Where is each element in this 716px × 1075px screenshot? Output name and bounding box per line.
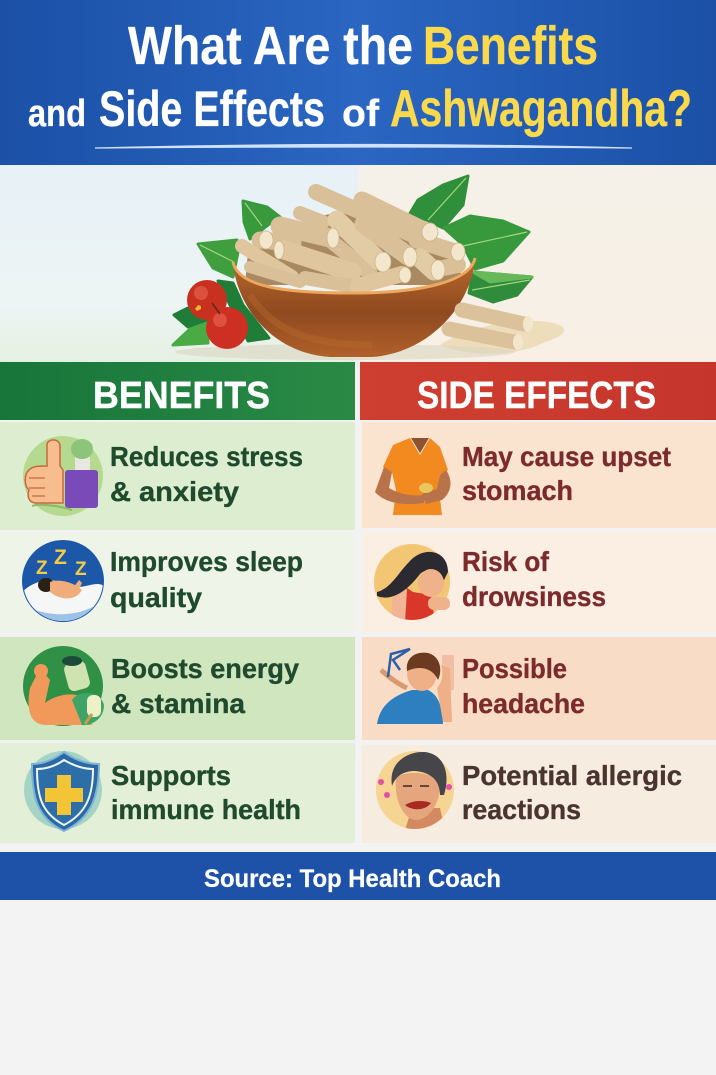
text: Boosts energy: [111, 653, 299, 684]
heading: side effects: [360, 362, 716, 420]
title: Side Effects: [99, 81, 325, 137]
icon: shield with cross: [24, 751, 102, 831]
leaf veins: [200, 178, 530, 290]
icon: drowsy woman: [374, 544, 450, 622]
back of root pile: [245, 212, 462, 285]
row: sleep: [0, 533, 355, 632]
back roots: [242, 192, 458, 288]
loose roots: [449, 310, 533, 350]
text: [462, 760, 682, 825]
icon: person holding stomach: [375, 438, 451, 515]
text: May cause upset: [462, 441, 671, 472]
icon: sleeping person: Z: [75, 559, 87, 580]
text: reactions: [462, 794, 581, 825]
row: drowsiness: [362, 532, 716, 632]
row: reduces stress: [0, 422, 355, 530]
text: Supports: [111, 760, 231, 791]
row: upset stomach: [362, 422, 716, 528]
text: headache: [462, 688, 585, 719]
leaves: [173, 176, 532, 345]
bowl: [233, 258, 475, 357]
panel: benefits: [0, 362, 355, 843]
text: Reduces stress: [110, 441, 303, 472]
header banner: [0, 0, 716, 165]
text: drowsiness: [462, 581, 606, 612]
text: [462, 546, 606, 612]
heading: benefits: BENEFITS: [93, 375, 270, 417]
text: [110, 546, 303, 613]
text: [110, 441, 303, 507]
icon: man with allergic reaction: [376, 751, 454, 830]
berries: [187, 280, 248, 349]
heading: side effects: SIDE EFFECTS: [417, 375, 656, 417]
text: quality: [110, 582, 202, 613]
text: stomach: [462, 475, 573, 506]
text: Improves sleep: [110, 546, 303, 577]
title: of: [342, 93, 379, 135]
text: [462, 441, 671, 506]
icon: thumbs up and bottle: [23, 436, 103, 516]
title: [28, 16, 692, 138]
text: [462, 653, 585, 719]
row: energy: [0, 637, 355, 740]
icon: sleeping person: Z: [54, 546, 67, 569]
panel: side effects: [360, 362, 716, 843]
source bar: Source: Top Health Coach: [204, 865, 501, 893]
row: headache: [362, 637, 716, 740]
row: allergic reactions: [362, 745, 716, 843]
row: immune: [0, 743, 355, 843]
icon: man with headache: [377, 649, 454, 724]
text: & anxiety: [110, 476, 239, 507]
heading: benefits: [0, 362, 355, 420]
text: Risk of: [462, 546, 550, 577]
text: immune health: [111, 794, 301, 825]
text: Possible: [462, 653, 567, 684]
text: Potential allergic: [462, 760, 682, 791]
root cut ends: [259, 223, 465, 283]
text: [111, 653, 299, 719]
icon: sleeping person: [22, 540, 104, 625]
hero panel: [0, 165, 716, 362]
text: [111, 760, 301, 825]
title: Benefits: [423, 16, 598, 76]
text: & stamina: [111, 688, 245, 719]
title: What Are the: [128, 16, 413, 76]
title: and: [28, 93, 86, 135]
illustration: bowl of ashwagandha roots: [173, 176, 564, 360]
source bar: [0, 852, 716, 900]
icon: sleeping person: Z: [36, 558, 48, 579]
icon: strong arm: [23, 646, 104, 726]
